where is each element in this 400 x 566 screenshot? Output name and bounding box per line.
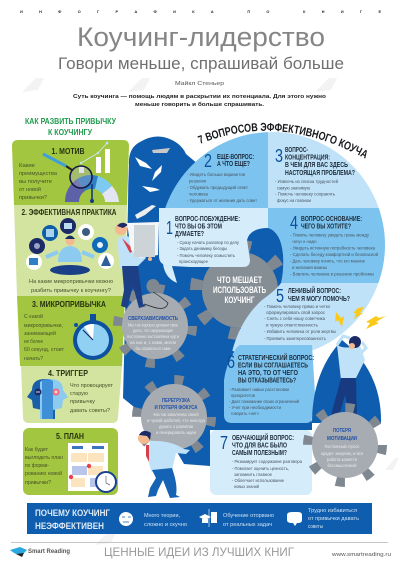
panel: question 2: - Увидеть больше вариантов (187, 172, 246, 177)
panel: question 4: «хочу» и «надо» (292, 239, 317, 244)
panel: question 1: - Помочь человеку осмыслить (177, 253, 236, 258)
panel: question 6: СТРАТЕГИЧЕСКИЙ ВОПРОС: (238, 353, 314, 362)
panel: plan: 5. ПЛАН (56, 431, 84, 441)
gear: overload: и генерировать идеи (156, 430, 197, 435)
panel: question 2 (187, 151, 258, 203)
panel: motive: преимущества (19, 171, 57, 177)
panel: why coaching is ineffective: НЕЭФФЕКТИВЕН (35, 521, 104, 531)
subtitle: Говори меньше, спрашивай больше (58, 54, 344, 73)
figure: stressed man (329, 336, 366, 423)
gear: overload: И ПОТЕРЯ ФОКУСА (154, 405, 198, 411)
heading: seven questions: 7 ВОПРОСОВ ЭФФЕКТИВНОГО КОУЧА (198, 122, 367, 159)
icon: learning (199, 509, 217, 527)
panel: question 6: - Учет при необходимости (229, 405, 281, 410)
panel: question 6: - Развивает навык расстановки (229, 387, 289, 392)
title: Коучинг-лидерство (77, 22, 325, 52)
panel: motive: вы получите (19, 179, 52, 185)
panel: question 6: - Дает понимание своих ограничений (229, 398, 299, 404)
top label: И Н Ф О Г Р А Ф И К А П О К Н И Г Е (20, 10, 381, 14)
panel: question 1: ВОПРОС-ПОБУЖДЕНИЕ: (175, 216, 240, 223)
panel: question 6: НА ЭТО, ТО ОТ ЧЕГО (238, 370, 298, 377)
panel: trigger: привычку (70, 399, 95, 405)
panel: question 1: происходящее (179, 259, 208, 264)
panel: question 3: - Извлечь из списка трудностей (275, 178, 338, 184)
panel: question 5: ЛЕНИВЫЙ ВОПРОС: (288, 286, 341, 295)
gear: overload (137, 380, 211, 454)
summary (73, 94, 326, 108)
panel: plan: по форми- (25, 463, 49, 469)
panel: question 7: - Резюмирует содержание разговора (232, 459, 302, 464)
panel: question 5: ЧЕМ Я МОГУ ПОМОЧЬ? (288, 296, 350, 303)
panel: practice: 2. ЭФФЕКТИВНАЯ ПРАКТИКА (22, 207, 116, 217)
gear: lost motivation: крадет энергию, и вся (321, 451, 363, 456)
footer logo (10, 547, 70, 557)
panel: question 5: - Помочь человеку прямо и четко (264, 304, 330, 309)
panel: micro habit: С какой (24, 313, 43, 320)
gear: lost motivation: работа кажется (327, 457, 357, 462)
gear: over-dependence: Мы так хорошо делаем свое (128, 322, 179, 328)
panel: micro habit: 60 секунд, стоит (24, 347, 65, 353)
panel: question 3: КОНЦЕНТРАЦИЯ: (285, 154, 330, 162)
panel: question 4: и желания важны (292, 265, 327, 270)
panel: trigger: 4. ТРИГГЕР (48, 368, 88, 378)
footer slogan: ЦЕННЫЕ ИДЕИ ИЗ ЛУЧШИХ КНИГ (104, 545, 294, 559)
panel: motive (12, 140, 129, 205)
gear: lost motivation: ПОТЕРЯ (333, 428, 351, 434)
panel: question 2: человека (189, 192, 208, 196)
panel: question 3 (275, 146, 355, 203)
gear: over-dependence: на нас и, с нами, могли (130, 340, 177, 345)
panel: question 4: ВОПРОС-ОСНОВАНИЕ: (301, 216, 362, 223)
footer url: www.smartreading.ru (332, 552, 391, 558)
panel: why coaching is ineffective: от реальных задач (223, 522, 272, 528)
figure: man with papers (115, 222, 159, 308)
gear: over-dependence: бы справиться сами (136, 346, 171, 351)
panel: question 3: НАСТОЯЩАЯ ПРОБЛЕМА? (285, 170, 355, 177)
panel: question 5: - Проявить заинтересованность (264, 336, 327, 341)
panel: question 2: ЕЩЕ-ВОПРОС: (217, 154, 254, 161)
panel: why coaching is ineffective (27, 503, 372, 534)
panel: motive: от новой (19, 186, 41, 193)
gear: lost motivation: Постоянный стресс (324, 444, 360, 449)
panel: why coaching is ineffective: Трудно избавиться (308, 508, 357, 514)
panel: question 5: - Снять с себя ношу советчика (264, 316, 325, 321)
panel: trigger: давать советы? (70, 408, 110, 414)
icon: ball and chain (144, 279, 168, 308)
gear: overload: ПЕРЕГРУЗКА (162, 398, 190, 404)
gear: lost motivation (308, 408, 382, 482)
icon: two heads (27, 379, 68, 419)
panel: question 4: - Сделать беседу комфортной и безопасной (290, 251, 378, 257)
panel: question 6: ЕСЛИ ВЫ СОГЛАШАЕТЕСЬ (238, 362, 308, 370)
panel: question 3: В ЧЕМ ДЛЯ ВАС ЗДЕСЬ (285, 162, 348, 169)
panel: trigger: старую (70, 391, 88, 397)
figure: carrying man (138, 431, 190, 498)
icon: stopwatch (73, 314, 113, 360)
gear label: what prevents coaching (213, 275, 266, 305)
left heading (25, 116, 117, 137)
panel: question 7: ОБУЧАЮЩИЙ ВОПРОС: (232, 433, 294, 442)
panel: question 1: - Сразу начать разговор по делу (177, 240, 240, 245)
left heading: К КОУЧИНГУ (48, 127, 93, 137)
panel: why coaching is ineffective: ПОЧЕМУ КОУЧИНГ (35, 508, 110, 518)
panel: why coaching is ineffective: советы (308, 524, 323, 530)
gear label: what prevents coaching: КОУЧИНГ (224, 295, 254, 305)
panel: plan: привычки? (25, 480, 51, 486)
panel: question 2: А ЧТО ЕЩЕ? (217, 161, 250, 168)
icon: flying papers (135, 148, 170, 219)
panel: question 7: 7 (220, 433, 228, 453)
summary: меньше говорить и больше спрашивать. (135, 101, 265, 108)
panel: question 5: и чужую ответственность (266, 322, 319, 328)
gear: over-dependence: СВЕРХЗАВИСИМОСТЬ (128, 316, 178, 322)
panel: plan: рованию новой (25, 470, 62, 477)
panel: question 1: ЧТО ВЫ ОБ ЭТОМ (175, 224, 222, 230)
author: Майкл Стеньер (175, 80, 224, 87)
panel: micro habit: 3. МИКРОПРИВЫЧКА (32, 299, 106, 309)
panel: micro habit: занимающей (24, 330, 56, 337)
panel: why coaching is ineffective: сложно и скучно (144, 522, 187, 528)
panel: micro habit: микропривычки, (24, 323, 63, 329)
icon: growth bars and gauge (43, 142, 119, 203)
panel: motive: 1. МОТИВ (52, 146, 84, 156)
panel: plan (23, 428, 118, 495)
panel: plan: выглядеть план (25, 455, 63, 461)
panel: practice: разбить привычку к коучингу? (31, 288, 111, 294)
left heading: КАК РАЗВИТЬ ПРИВЫЧКУ (25, 116, 117, 126)
panel: question 5: 5 (276, 286, 284, 306)
gear: over-dependence: дело, что окружающих (133, 328, 174, 333)
panel: question 6: приоритетов (231, 393, 255, 398)
panel: question 7 (210, 430, 312, 495)
gear label: what prevents coaching: ЧТО МЕШАЕТ (217, 275, 262, 285)
panel: question 4: - Дать человеку понять, что его мнение (290, 258, 365, 264)
panel: trigger (21, 366, 122, 423)
icon: meditating person with circles (26, 218, 114, 275)
panel: practice: На какие микропривычки можно (29, 279, 113, 285)
panel: why coaching is ineffective: от привычки давать (308, 516, 359, 522)
panel: question 1: - Задать динамику беседы (177, 246, 227, 251)
panel: question circle (150, 130, 390, 352)
panel: habit steps (12, 140, 129, 495)
panel: motive: привычки? (19, 195, 47, 201)
gear: over-dependence (118, 289, 192, 363)
panel: question 6: ВЫ ОТКАЗЫВАЕТЕСЬ? (238, 378, 296, 384)
panel: question 5 (264, 286, 350, 341)
panel: question 2: 2 (204, 151, 212, 171)
panel: micro habit: не более (24, 339, 43, 345)
panel: question 1 (159, 208, 268, 283)
gear label: what prevents coaching: ИСПОЛЬЗОВАТЬ (213, 285, 266, 295)
panel: question 4: 4 (290, 213, 298, 233)
panel: why coaching is ineffective: Обучение оторвано (223, 513, 274, 519)
gear: lost motivation: бессмысленной (328, 463, 357, 468)
panel: question 4: ЧЕГО ВЫ ХОТИТЕ? (301, 224, 351, 230)
gear: lost motivation: МОТИВАЦИИ (327, 436, 357, 442)
panel: question 3: самую значимую (277, 186, 311, 190)
panel: question 1: 1 (166, 218, 173, 238)
panel: question 4: - Увидеть истинную потребность человека (290, 246, 375, 250)
panel: question 7: новых знаний (234, 483, 259, 489)
panel: question 4: - Вовлечь человека в решение проблемы (290, 272, 374, 276)
panel: question 7: ЧТО ДЛЯ ВАС БЫЛО (232, 442, 287, 450)
panel: question 7: - Облегчает использование (232, 478, 284, 483)
panel: question 2: решения (189, 178, 206, 184)
panel: question 7: - Помогает оценить ценность, (232, 466, 289, 471)
panel: question 3: фокус на главном (277, 198, 311, 203)
panel: question 3: 3 (275, 146, 283, 166)
panel: plan: Как будет (25, 447, 49, 453)
gear: overload: и чужой работой, что некогда (147, 418, 206, 423)
panel: question 2: - Удержаться от желания дать совет (187, 198, 258, 203)
gear: main obstacle (196, 246, 284, 334)
panel: practice (14, 205, 127, 296)
panel: dark blue question mark background (123, 136, 312, 466)
panel: why coaching is ineffective: Много теории, (144, 513, 181, 519)
panel: question 3: - Помочь человеку сохранять (275, 192, 336, 196)
panel: motive: Какие (19, 163, 35, 169)
panel: micro habit (17, 296, 125, 366)
icon: planner and clock (68, 443, 116, 492)
panel: question 2: - Обдумать предыдущий ответ (187, 184, 249, 190)
panel: question 5: - Избавить человека от роли жертвы (264, 329, 336, 334)
summary: Суть коучинга — помощь людям в раскрытии их потенциала. Для этого нужно (73, 94, 326, 100)
panel: question 4 (290, 213, 378, 276)
icon: bored face (119, 512, 133, 526)
panel: question 3: ВОПРОС- (285, 147, 308, 154)
panel: trigger: Что провоцирует (70, 383, 114, 389)
panel: question 7: запомнить главное (234, 472, 272, 477)
panel: question 6 (224, 345, 322, 423)
panel: question 6: говорить «нет» (231, 411, 259, 416)
panel: question 4: - Помочь человеку увидеть грань между (290, 232, 370, 238)
icon: paper stack (127, 222, 159, 258)
panel: question 1: ДУМАЕТЕ? (175, 231, 204, 238)
figure: hill behind stressed man (312, 340, 381, 423)
panel: question 6: 6 (227, 352, 235, 372)
icon: speech bubble (287, 512, 302, 526)
panel: question 7: САМЫМ ПОЛЕЗНЫМ? (232, 450, 287, 457)
gear: overload: думать о развитии (159, 424, 194, 429)
panel: micro habit: начать? (24, 356, 43, 362)
gear: over-dependence: постоянно заставляем идти (127, 334, 180, 339)
panel: question 5: сформулировать свой запрос (266, 309, 326, 315)
icon: lightning bolts (335, 307, 386, 329)
footer logo: Smart Reading (28, 549, 70, 555)
gear: overload: Мы так заваленны своей (154, 412, 199, 417)
